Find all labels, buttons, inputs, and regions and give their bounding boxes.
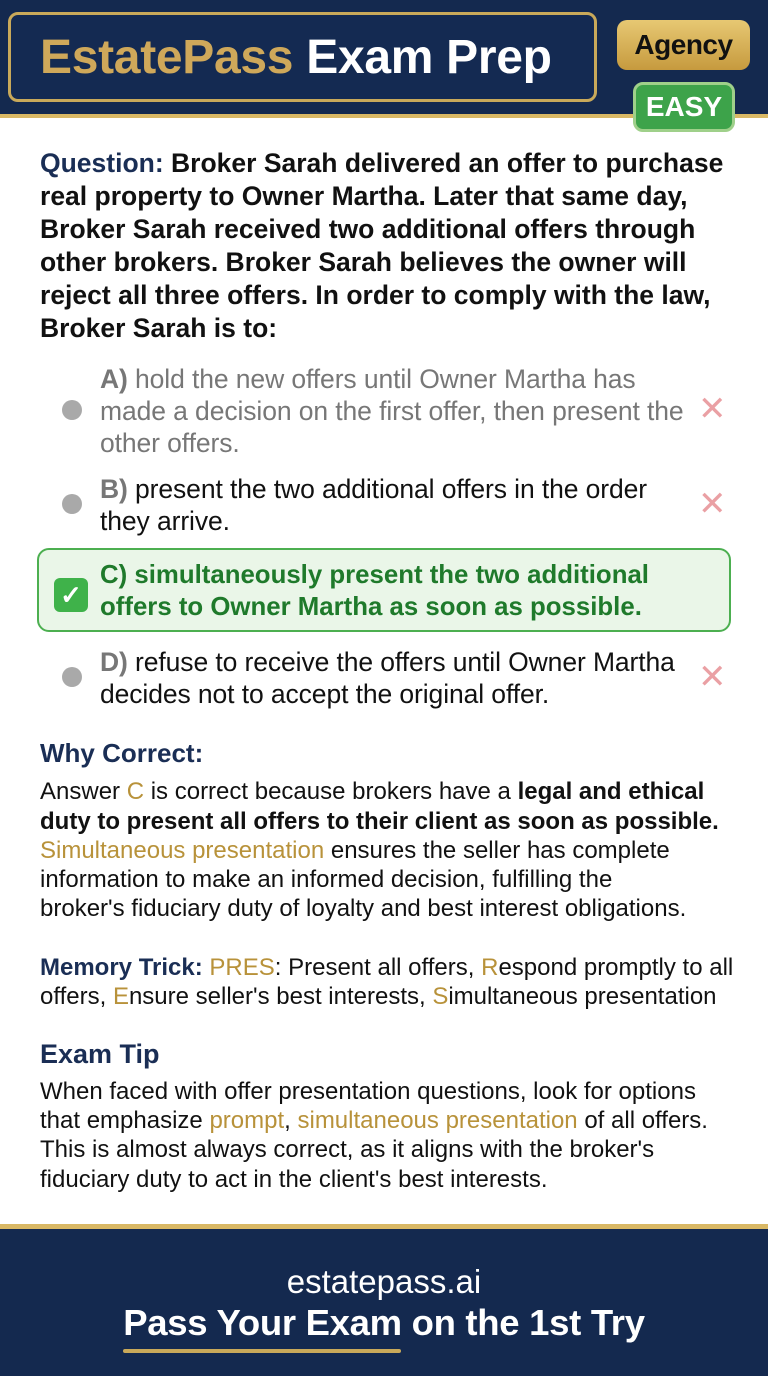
exam tip text: that emphasize prompt, simultaneous presentation of all offers. [40,1107,708,1134]
option A: other offers. [100,428,240,458]
exam tip text [40,1078,708,1193]
exam tip text: This is almost always correct, as it aligns with the broker's [40,1136,654,1163]
option D: D) refuse to receive the offers until Owner Martha [100,647,675,677]
why correct text: information to make an informed decision, fulfilling the [40,866,612,893]
why correct heading: Why Correct: [40,738,203,768]
question text: other brokers. Broker Sarah believes the owner will [40,247,687,277]
badge: Agency: Agency [634,29,733,60]
option C correct: offers to Owner Martha as soon as possible. [100,593,642,621]
option D [62,647,726,709]
option A: A) hold the new offers until Owner Martha has [100,364,636,394]
option A [62,364,726,458]
question text: Question: Broker Sarah delivered an offer to purchase [40,148,723,178]
memory trick: Memory Trick: PRES: Present all offers, Respond promptly to all [40,954,733,981]
option B: they arrive. [100,506,230,536]
why correct text: Answer C is correct because brokers have a legal and ethical [40,778,704,805]
why correct text: duty to present all offers to their client as soon as possible. [40,808,719,835]
header band [0,0,768,118]
why correct text: broker's fiduciary duty of loyalty and best interest obligations. [40,895,686,922]
text: Broker Sarah is to: [40,313,277,343]
option A: made a decision on the first offer, then present the [100,396,684,426]
option B: B) present the two additional offers in the order [100,474,647,504]
exam tip heading: Exam Tip [40,1039,160,1069]
question text: Broker Sarah received two additional offers through [40,214,695,244]
icon: check: ✓ [60,580,82,610]
exam tip text: fiduciary duty to act in the client's best interests. [40,1166,548,1193]
title text: EstatePass Exam Prep [40,31,552,84]
icon: check [54,578,88,612]
footer url: estatepass.ai [287,1263,481,1300]
badge: EASY: EASY [646,91,722,122]
title box [8,12,597,102]
option A: ✕ [698,390,726,428]
option C correct [37,548,731,632]
memory trick: offers, Ensure seller's best interests, Simultaneous presentation [40,983,717,1010]
why correct text [40,778,719,922]
exam tip text: When faced with offer presentation questions, look for options [40,1078,696,1105]
badge: Agency [617,20,750,70]
option C correct: C) simultaneously present the two additional [100,561,649,589]
memory trick [40,954,733,1010]
option B: ✕ [698,485,726,523]
question text [40,148,723,343]
footer [0,1224,768,1376]
option D: ✕ [698,658,726,696]
question text: real property to Owner Martha. Later that same day, [40,181,687,211]
option D: decides not to accept the original offer. [100,679,549,709]
question text: reject all three offers. In order to comply with the law, [40,280,710,310]
footer slogan: Pass Your Exam on the 1st Try [123,1302,645,1343]
badge: EASY [633,82,735,132]
option B [62,474,726,536]
why correct text: Simultaneous presentation ensures the seller has complete [40,837,670,864]
